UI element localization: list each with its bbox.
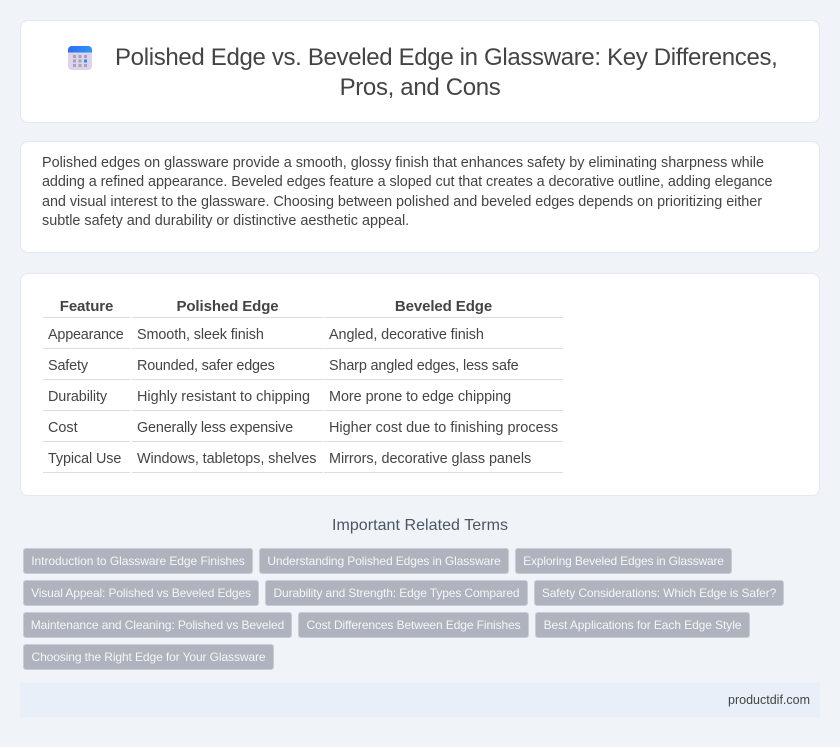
panel: comparison table	[20, 273, 820, 496]
tag: Cost Differences Between Edge Finishes	[306, 618, 521, 632]
tag: Understanding Polished Edges in Glassware	[267, 554, 501, 568]
row: Cost: Generally less expensive	[137, 420, 293, 436]
table header: Beveled Edge: Beveled Edge	[395, 298, 492, 315]
tag: Choosing the Right Edge for Your Glassware	[32, 650, 265, 664]
table header: Feature: Feature	[60, 298, 113, 315]
tag	[23, 644, 274, 670]
icon: calendar grid	[68, 46, 92, 70]
text block: line 2: adding a refined appearance. Beveled edges feature a sloped cut that creates a decorative outline, adding elegance	[42, 174, 772, 190]
tag	[23, 580, 259, 606]
header card	[20, 20, 820, 123]
row: Typical Use: Typical Use	[48, 451, 121, 467]
row: Safety: Safety	[48, 358, 88, 374]
row: Typical Use: Mirrors, decorative glass panels	[329, 451, 531, 467]
row: Durability: More prone to edge chipping	[329, 389, 511, 405]
tag	[23, 548, 253, 574]
row: Safety: Sharp angled edges, less safe	[329, 358, 519, 374]
text block: line 4: subtle safety and durability or distinctive aesthetic appeal.	[42, 213, 409, 229]
tag	[298, 612, 529, 638]
table header: Polished Edge: Polished Edge	[176, 298, 279, 315]
tag	[259, 548, 509, 574]
row: Durability: Durability	[48, 389, 107, 405]
footer source text: productdif.com	[728, 693, 810, 707]
tag: Durability and Strength: Edge Types Compared	[274, 586, 519, 600]
tag	[535, 612, 750, 638]
tag	[515, 548, 732, 574]
panel: introduction text	[20, 141, 820, 253]
tag	[23, 612, 292, 638]
row: Durability: Highly resistant to chipping	[137, 389, 310, 405]
row: Cost: Higher cost due to finishing process	[329, 420, 558, 436]
tag: Best Applications for Each Edge Style	[544, 618, 741, 632]
row: Safety: Rounded, safer edges	[137, 358, 275, 374]
text block: line 1: Polished edges on glassware provide a smooth, glossy finish that enhances safety by eliminating sharpness while	[42, 155, 764, 171]
title: Polished Edge vs. Beveled Edge in Glassware: Key Differences,	[115, 44, 777, 71]
tag	[265, 580, 528, 606]
tag: Visual Appeal: Polished vs Beveled Edges	[31, 586, 251, 600]
title	[115, 44, 777, 101]
row: Typical Use	[48, 451, 531, 467]
row: Appearance: Smooth, sleek finish	[137, 327, 264, 343]
row: Typical Use: Windows, tabletops, shelves	[137, 451, 316, 467]
tag list	[23, 548, 784, 670]
row: Safety	[48, 358, 519, 374]
row: Cost	[48, 420, 558, 436]
row: Appearance: Angled, decorative finish	[329, 327, 484, 343]
tag	[534, 580, 784, 606]
row: Cost: Cost	[48, 420, 78, 436]
footer bar	[20, 683, 820, 717]
tag: Safety Considerations: Which Edge is Safer?	[542, 586, 776, 600]
tag: Maintenance and Cleaning: Polished vs Beveled	[31, 618, 284, 632]
row: Appearance: Appearance	[48, 327, 124, 343]
row: Durability	[48, 389, 511, 405]
text block: line 3: and visual interest to the glassware. Choosing between polished and beveled edges depends on prioritizing either	[42, 194, 762, 210]
row: Appearance	[48, 327, 484, 343]
heading: related terms: Important Related Terms	[332, 517, 508, 534]
title: Pros, and Cons	[340, 74, 500, 101]
tag: Exploring Beveled Edges in Glassware	[523, 554, 724, 568]
tag: Introduction to Glassware Edge Finishes	[31, 554, 245, 568]
